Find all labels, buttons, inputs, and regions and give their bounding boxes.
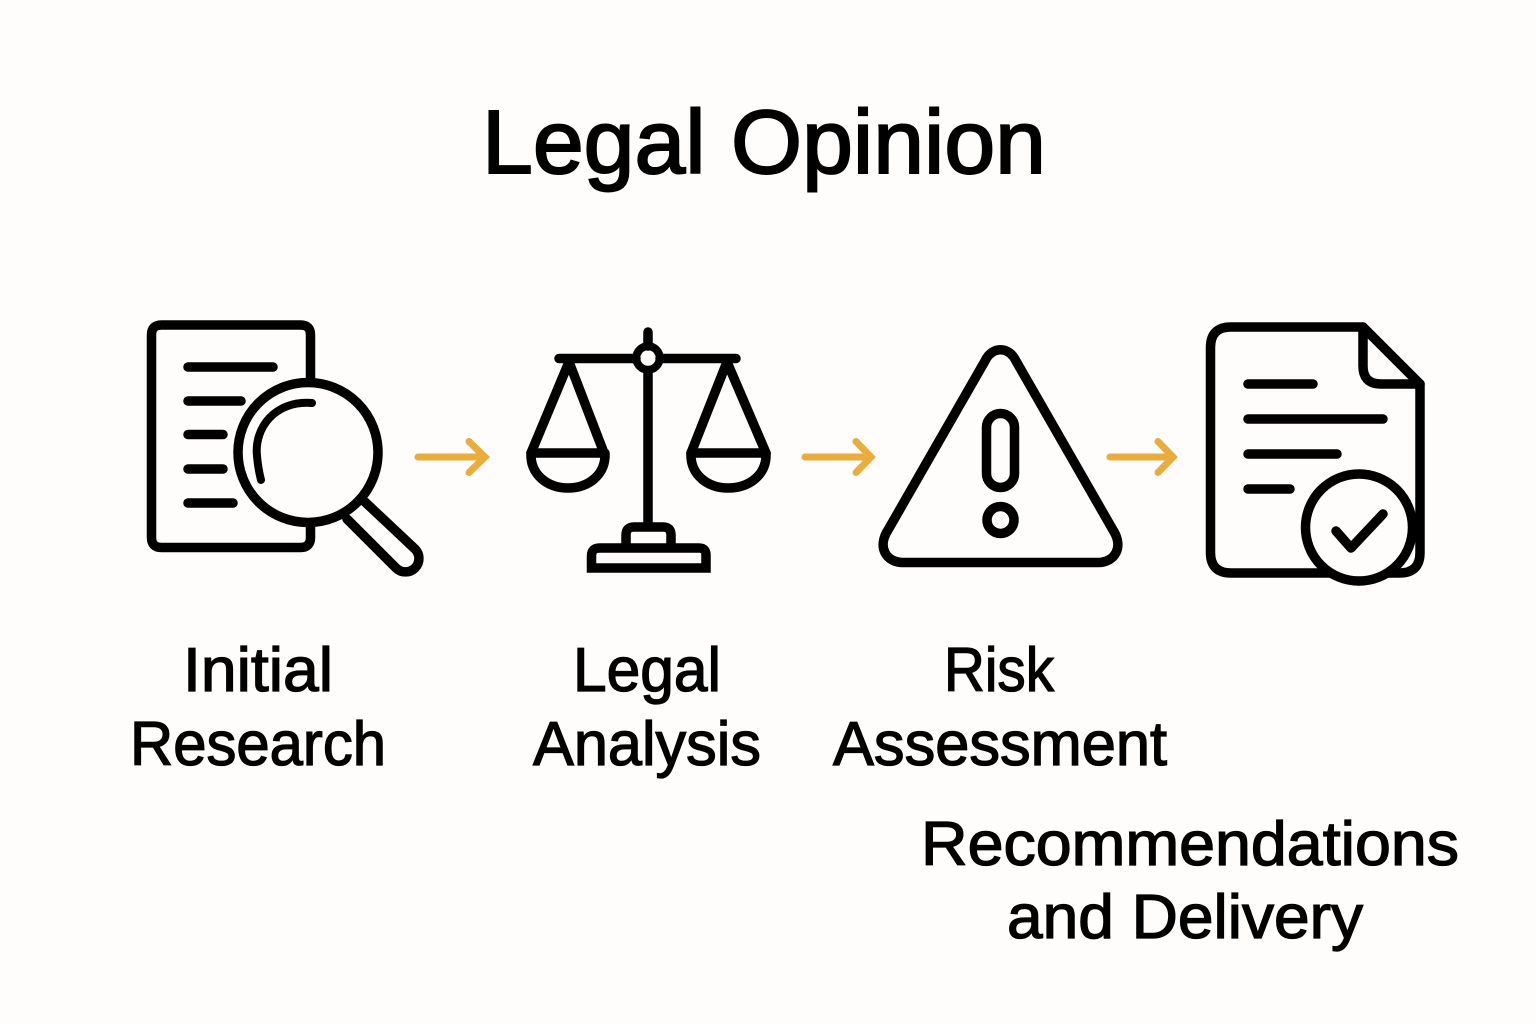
arrow 1	[418, 442, 485, 472]
label: Initial Research: Initial	[183, 636, 333, 705]
icon: document with check badge	[1210, 327, 1420, 581]
icon: warning triangle	[883, 350, 1118, 562]
label: Risk Assessment: Assessment	[833, 710, 1167, 779]
label: Initial Research: Research	[130, 710, 386, 779]
label: Recommendations and Delivery	[921, 810, 1459, 952]
label: Initial Research	[130, 636, 386, 779]
label: Legal Analysis	[533, 636, 761, 779]
label: Legal Analysis: Analysis	[533, 710, 761, 779]
label: Recommendations and Delivery: and Delivery	[1007, 883, 1363, 952]
arrow 3	[1110, 442, 1173, 472]
label: Legal Analysis: Legal	[573, 636, 721, 705]
arrow 2	[805, 442, 871, 472]
label: Risk Assessment: Risk	[944, 636, 1055, 705]
icon: document with magnifying glass	[152, 325, 419, 572]
icon: scales of justice	[531, 332, 766, 568]
label: Recommendations and Delivery: Recommendations	[921, 810, 1459, 879]
title: Legal Opinion	[482, 93, 1046, 193]
label: Risk Assessment	[833, 636, 1167, 779]
